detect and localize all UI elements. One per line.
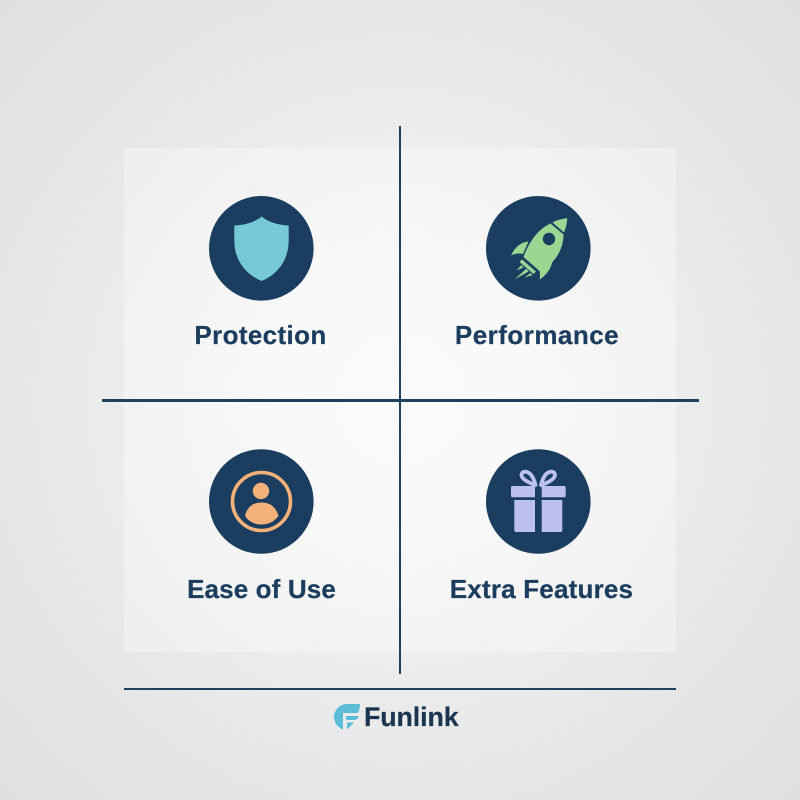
icon: shield <box>209 196 314 301</box>
heading: Ease of Use: Ease of Use <box>187 574 336 604</box>
horizontal divider <box>102 399 699 402</box>
heading: Extra Features: Extra Features <box>450 574 633 604</box>
wordmark: Funlink <box>364 702 459 732</box>
footer rule <box>124 688 676 690</box>
icon: rocket <box>486 196 591 301</box>
icon: gift <box>486 449 591 554</box>
logo: Funlink <box>334 702 459 732</box>
icon: user <box>209 449 314 554</box>
vertical divider <box>399 126 401 674</box>
heading: Performance: Performance <box>455 320 619 350</box>
icon: logo mark <box>334 704 360 730</box>
panel: quadrant background <box>124 148 676 652</box>
heading: Protection: Protection <box>194 320 327 350</box>
